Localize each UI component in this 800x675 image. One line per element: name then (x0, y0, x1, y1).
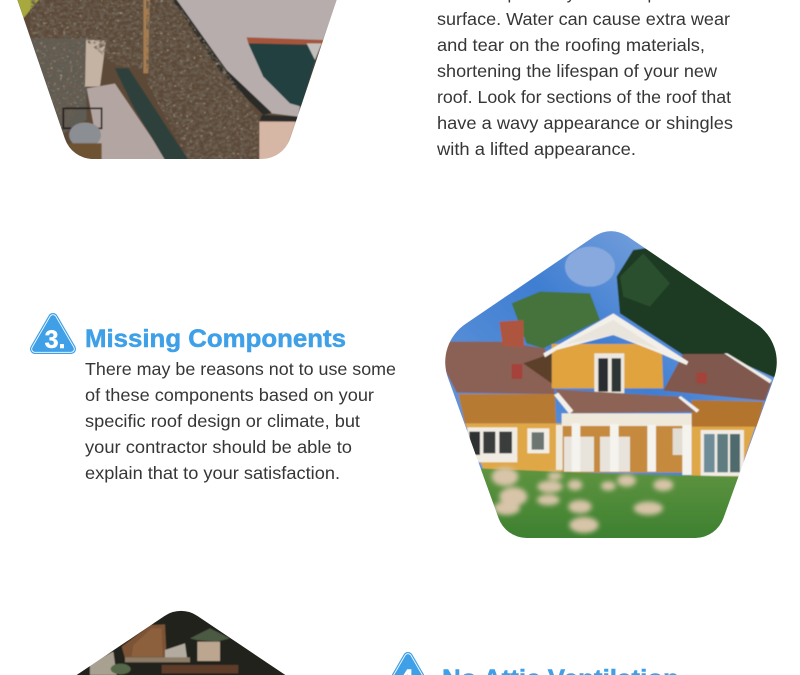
panel: roof photo 2 (13, 0, 340, 162)
heading: missing components: Missing Components (85, 325, 346, 353)
text block: missing components paragraph (85, 359, 396, 483)
stone wall texture (30, 0, 259, 159)
text block: water damage paragraph: with a lifted appearance. (436, 139, 636, 159)
text block: missing components paragraph: your contractor should be able to (85, 437, 352, 457)
text block: missing components paragraph: of these components based on your (85, 385, 374, 405)
text block: water damage paragraph: surface. Water can cause extra wear (437, 9, 730, 29)
text block: water damage paragraph: shortening the lifespan of your new (437, 61, 717, 81)
text block: water damage paragraph: have a wavy appearance or shingles (437, 113, 733, 133)
text block: water damage paragraph: roof. Look for sections of the roof that (437, 87, 731, 107)
icon: triangle number 3: 3. (45, 326, 65, 354)
text block: water damage paragraph: and tear on the roofing materials, (437, 35, 705, 55)
text block: missing components paragraph: specific roof design or climate, but (85, 411, 360, 431)
lower roof and lantern (63, 68, 188, 160)
icon: triangle number 4 (390, 657, 426, 675)
panel: attic shelf photo (76, 610, 286, 675)
text block: missing components paragraph: explain that to your satisfaction. (85, 463, 340, 483)
text block: water damage paragraph (436, 0, 733, 159)
icon: triangle number 3 (35, 318, 71, 354)
text block: missing components paragraph: There may be reasons not to use some (85, 359, 396, 379)
panel: yellow house photo (445, 231, 777, 538)
